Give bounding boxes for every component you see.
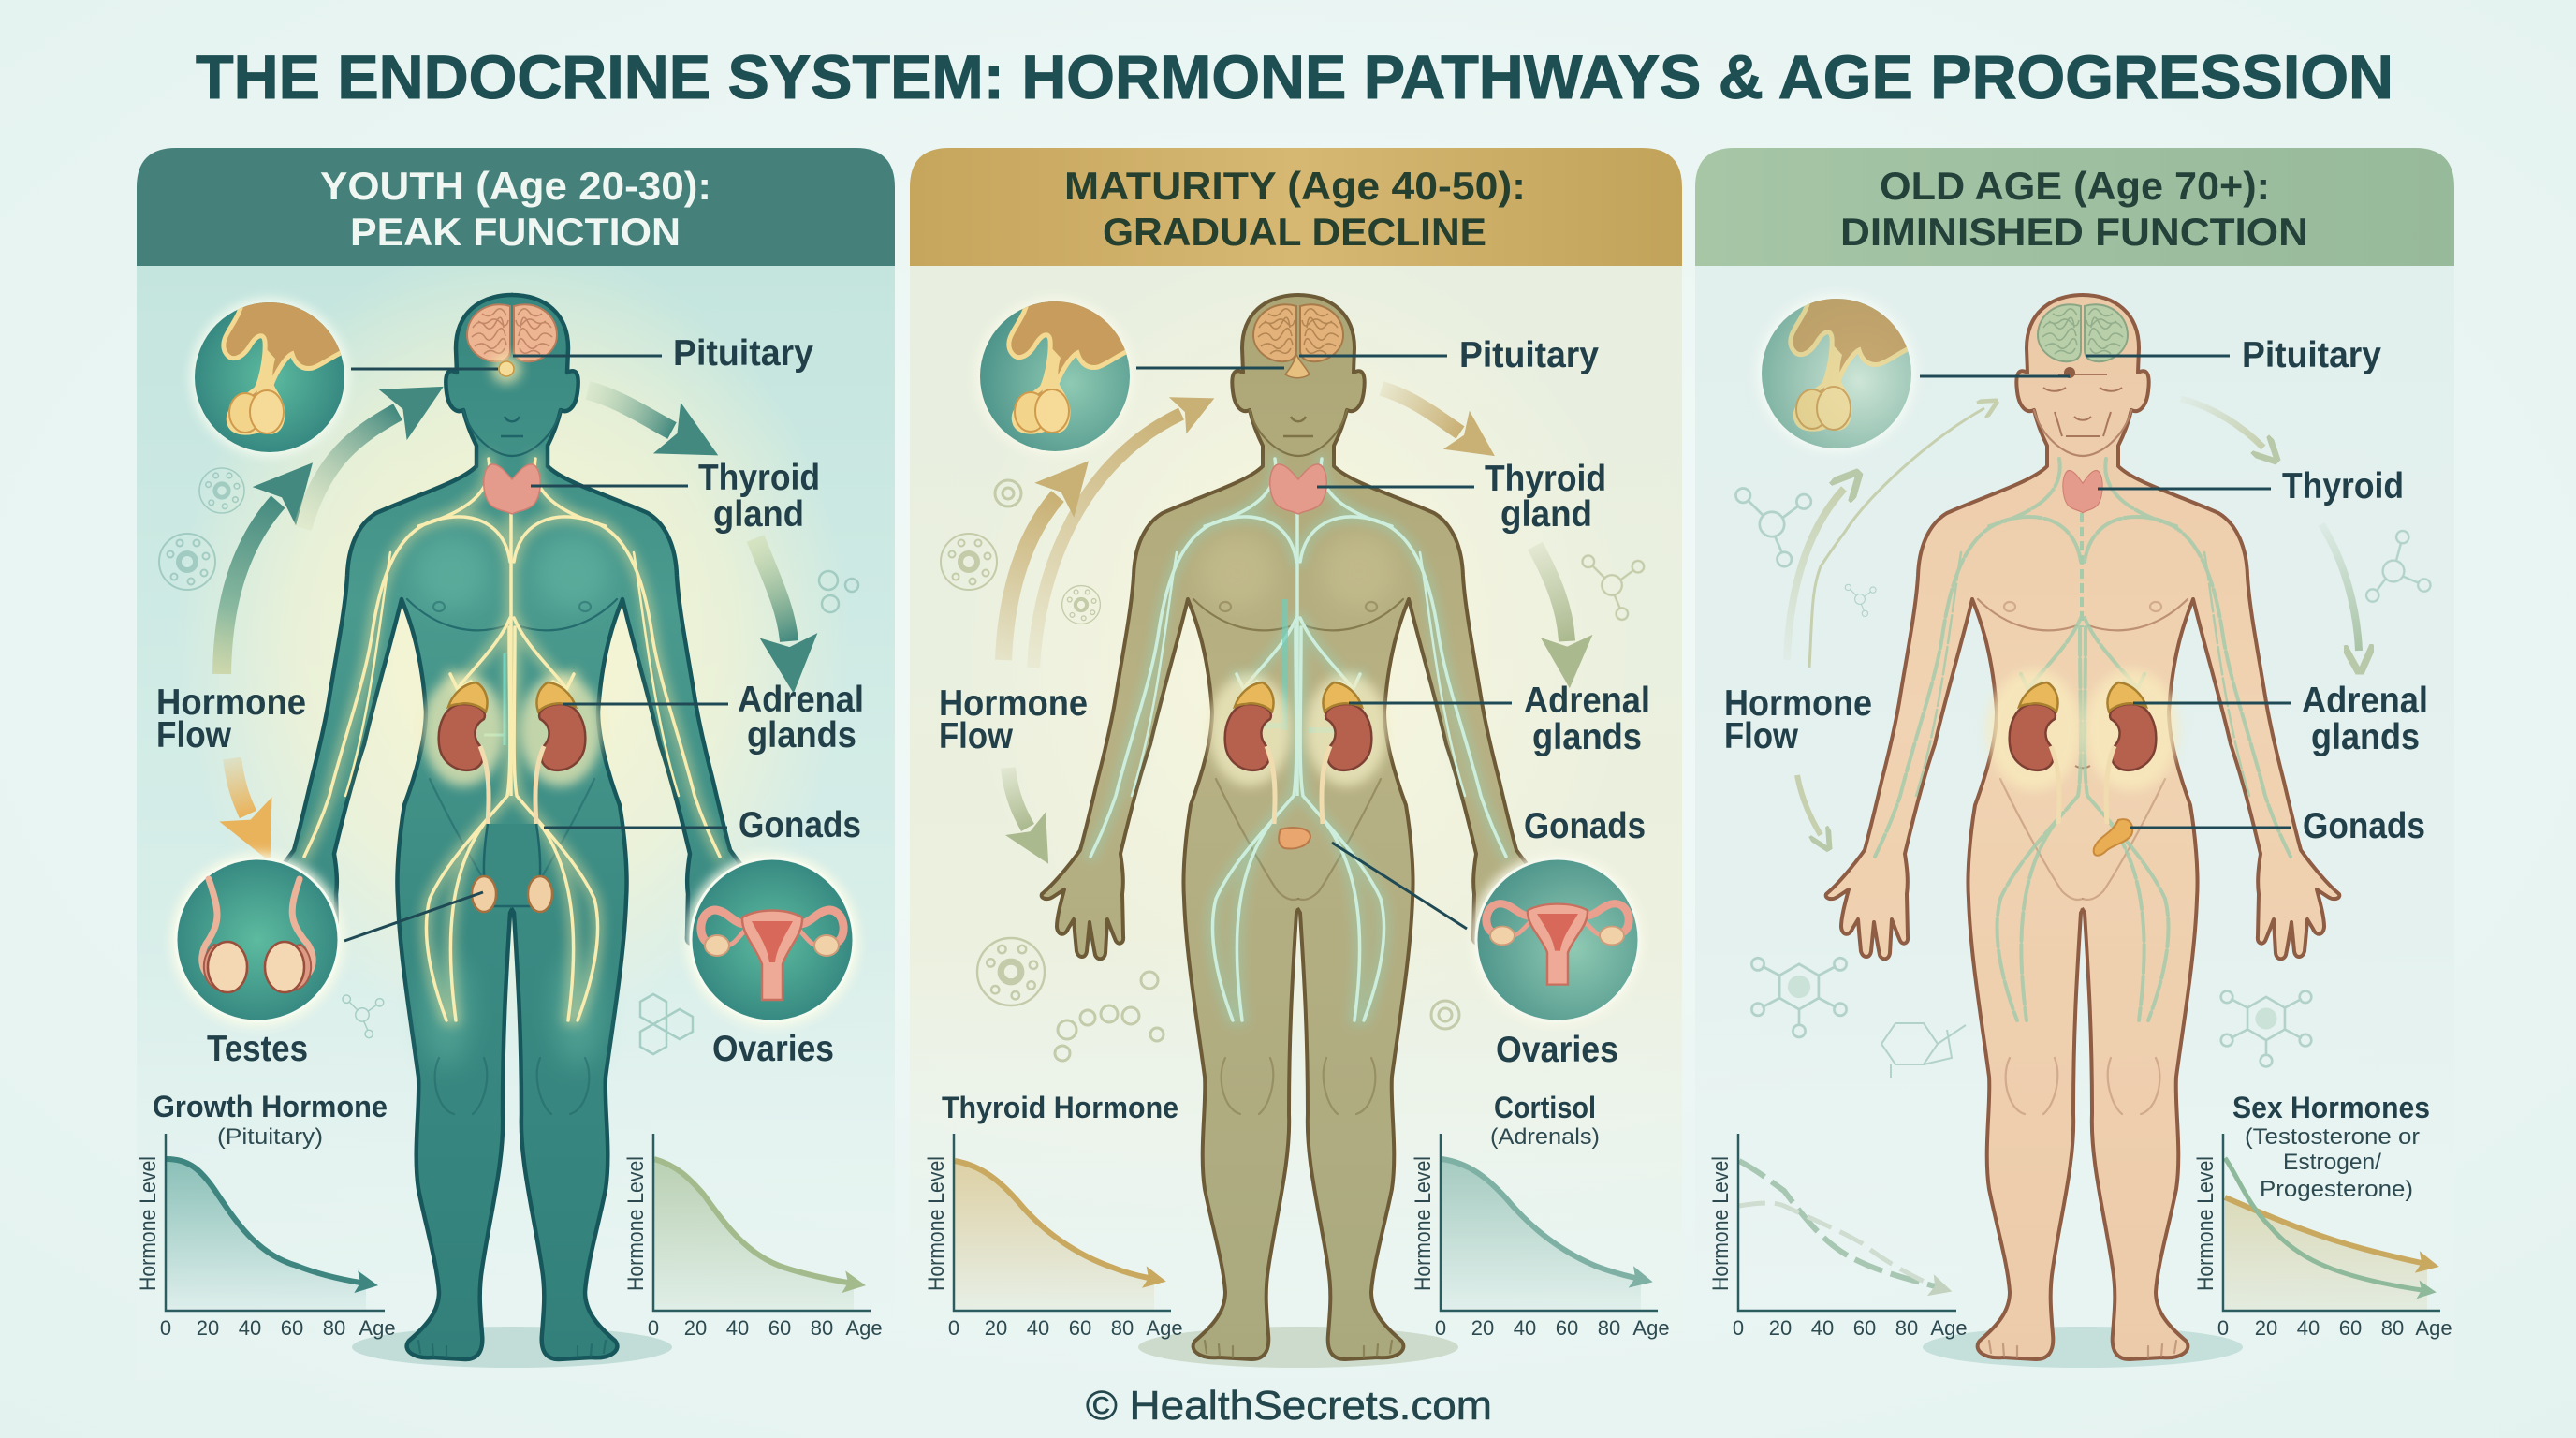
header: youth: PEAK FUNCTION (350, 210, 681, 254)
arrows: hormone flow (1003, 389, 1567, 828)
hormone pathways (1875, 459, 2291, 1020)
brain (467, 304, 557, 361)
chest highlights (1198, 532, 1398, 610)
chart: cortisol: (Adrenals) (1490, 1124, 1600, 1150)
header: old age: OLD AGE (Age 70+): (1880, 164, 2270, 208)
chart: faded dual decline: 80 (1895, 1316, 1918, 1340)
kidneys and adrenal glands (1987, 669, 2178, 824)
panel: youth (136, 148, 895, 1380)
chart: faded dual decline: 0 (1733, 1316, 1744, 1340)
chart: thyroid hormone: 40 (1027, 1316, 1049, 1340)
labels: gland (1500, 494, 1592, 535)
inset: ovaries (686, 854, 858, 1026)
floor shadow (1923, 1327, 2243, 1368)
chart: growth hormone: Growth Hormone (153, 1090, 388, 1123)
chart: growth hormone: Age (359, 1316, 396, 1340)
labels (1724, 335, 2428, 846)
chart: sex hormones: Progesterone) (2260, 1177, 2413, 1202)
chart: ovarian decline: Hormone Level (623, 1156, 649, 1291)
chart: faded dual decline: Age (1930, 1316, 1968, 1340)
arrows: hormone flow (222, 390, 789, 814)
decorative cells (159, 468, 858, 1054)
header: old age (1695, 148, 2454, 266)
header: youth: YOUTH (Age 20-30): (320, 164, 711, 208)
decorative molecules (1735, 489, 2437, 1078)
face (2043, 374, 2122, 768)
inset: ovaries (1471, 854, 1644, 1026)
labels: Ovaries (712, 1029, 834, 1069)
chart: cortisol: 20 (1471, 1316, 1494, 1340)
chart: cortisol: Cortisol (1494, 1091, 1596, 1124)
decorative cells (941, 480, 1644, 1061)
chart: sex hormones: 40 (2297, 1316, 2320, 1340)
labels: Testes (207, 1029, 308, 1069)
figure: maturity body (1042, 295, 1555, 1359)
thyroid gland (1270, 464, 1326, 514)
chart: cortisol: Hormone Level (1411, 1156, 1436, 1291)
pituitary gland point (1285, 354, 1310, 378)
pituitary gland point (2064, 367, 2075, 378)
chart: ovarian decline: 80 (811, 1316, 833, 1340)
chart: cortisol: Age (1632, 1316, 1670, 1340)
chart: growth hormone (136, 1090, 396, 1340)
labels: Adrenal (2302, 681, 2428, 721)
chart: growth hormone: 40 (239, 1316, 261, 1340)
labels: Ovaries (1496, 1030, 1618, 1070)
chart: growth hormone: Hormone Level (136, 1156, 161, 1291)
chart: growth hormone: 60 (281, 1316, 303, 1340)
glow behind figure (175, 243, 849, 1030)
inset: testes (171, 854, 344, 1026)
leader lines (1920, 356, 2291, 828)
labels: Hormone (156, 682, 306, 723)
leader lines (1136, 356, 1512, 929)
labels: glands (747, 715, 856, 756)
labels: glands (1532, 717, 1642, 757)
header: maturity (910, 148, 1682, 266)
figure: youth body (256, 295, 768, 1359)
figure: old age body (1826, 295, 2339, 1359)
chart: ovarian decline: 0 (648, 1316, 659, 1340)
chest and thigh highlights (412, 532, 612, 1067)
chart: cortisol: 80 (1598, 1316, 1620, 1340)
labels: Gonads (2303, 806, 2425, 846)
labels: Adrenal (1524, 681, 1650, 721)
chart: cortisol (1411, 1091, 1670, 1340)
chart: thyroid hormone: Hormone Level (924, 1156, 949, 1291)
gonad (1279, 828, 1310, 848)
kidneys and adrenal glands (422, 674, 602, 824)
glow behind figure (961, 234, 1635, 1039)
labels: Flow (1724, 716, 1799, 756)
panel: old age (1695, 148, 2454, 1380)
labels: glands (2311, 717, 2420, 757)
chart: ovarian decline (623, 1134, 883, 1340)
chart: cortisol: 40 (1514, 1316, 1536, 1340)
panel background: maturity (910, 266, 1682, 1380)
hormone pathways (1090, 459, 1506, 1020)
chart: growth hormone: 20 (197, 1316, 219, 1340)
chart: sex hormones (2193, 1091, 2452, 1340)
face (501, 417, 523, 436)
chart: sex hormones: Age (2415, 1316, 2452, 1340)
labels: Gonads (1524, 806, 1646, 846)
chart: ovarian decline: 20 (684, 1316, 707, 1340)
chart: thyroid hormone: 20 (985, 1316, 1007, 1340)
chart: ovarian decline: 40 (726, 1316, 749, 1340)
header: old age: DIMINISHED FUNCTION (1840, 210, 2308, 254)
labels: gland (713, 494, 804, 535)
chart: thyroid hormone (924, 1091, 1183, 1340)
brain (2038, 304, 2128, 361)
chart: faded dual decline (1708, 1134, 1968, 1340)
chart: sex hormones: Estrogen/ (2283, 1150, 2381, 1175)
chart: sex hormones: 20 (2255, 1316, 2277, 1340)
header: youth (137, 148, 895, 266)
labels: Flow (939, 716, 1014, 756)
labels: Thyroid (2282, 466, 2404, 506)
gonad (2094, 819, 2132, 856)
chart: faded dual decline: 60 (1853, 1316, 1876, 1340)
labels (939, 335, 1650, 1070)
chart: thyroid hormone: 80 (1111, 1316, 1134, 1340)
chart: ovarian decline: 60 (768, 1316, 791, 1340)
header: maturity: MATURITY (Age 40-50): (1064, 164, 1526, 208)
footer: copyright: © HealthSecrets.com (1086, 1383, 1492, 1429)
labels: Pituitary (1459, 335, 1599, 375)
panel background: youth (137, 266, 895, 1380)
labels: Thyroid (698, 458, 820, 498)
panel background: old age (1695, 266, 2454, 1380)
kidneys and adrenal glands (1208, 674, 1388, 824)
chart: sex hormones: 80 (2381, 1316, 2404, 1340)
title: THE ENDOCRINE SYSTEM: HORMONE PATHWAYS & AGE PROGRESSION (196, 42, 2393, 111)
chart: thyroid hormone: 0 (948, 1316, 959, 1340)
labels: Hormone (939, 683, 1088, 724)
leader lines (344, 356, 728, 941)
chart: cortisol: 60 (1556, 1316, 1578, 1340)
chart: growth hormone: 80 (323, 1316, 345, 1340)
labels: Gonads (739, 805, 861, 845)
chart: sex hormones: 0 (2217, 1316, 2229, 1340)
thyroid gland (2063, 471, 2102, 513)
chart: sex hormones: Sex Hormones (2232, 1091, 2430, 1124)
chart: thyroid hormone: 60 (1069, 1316, 1091, 1340)
chart: faded dual decline: 20 (1769, 1316, 1792, 1340)
labels: Pituitary (673, 333, 813, 374)
brain (1253, 304, 1343, 361)
panel: maturity (910, 148, 1682, 1380)
chart: growth hormone: (Pituitary) (217, 1124, 323, 1150)
gonads (472, 824, 552, 912)
arrows: hormone flow (1787, 399, 2359, 835)
pituitary gland point (491, 354, 521, 384)
chart: thyroid hormone: Thyroid Hormone (942, 1091, 1178, 1124)
labels: Pituitary (2242, 335, 2381, 375)
labels: Hormone (1724, 683, 1872, 724)
thyroid gland (484, 464, 540, 514)
chart: sex hormones: (Testosterone or (2245, 1124, 2420, 1150)
chart: ovarian decline: Age (845, 1316, 883, 1340)
chart: cortisol: 0 (1435, 1316, 1446, 1340)
chart: thyroid hormone: Age (1146, 1316, 1183, 1340)
chart: sex hormones: Hormone Level (2193, 1156, 2218, 1291)
chart: faded dual decline: Hormone Level (1708, 1156, 1734, 1291)
floor shadow (1138, 1327, 1458, 1368)
hormone pathways (304, 459, 720, 1020)
labels (156, 333, 864, 1069)
chart: faded dual decline: 40 (1811, 1316, 1834, 1340)
labels: Flow (156, 715, 232, 756)
labels: Adrenal (738, 680, 864, 720)
labels: Thyroid (1485, 459, 1606, 499)
header: maturity: GRADUAL DECLINE (1103, 210, 1486, 254)
inset: pituitary (1758, 294, 1916, 452)
inset: pituitary (191, 298, 349, 456)
chart: growth hormone: 0 (160, 1316, 171, 1340)
floor shadow (352, 1327, 672, 1368)
inset: pituitary (976, 297, 1134, 455)
chart: sex hormones: 60 (2339, 1316, 2362, 1340)
face (1283, 417, 1313, 436)
